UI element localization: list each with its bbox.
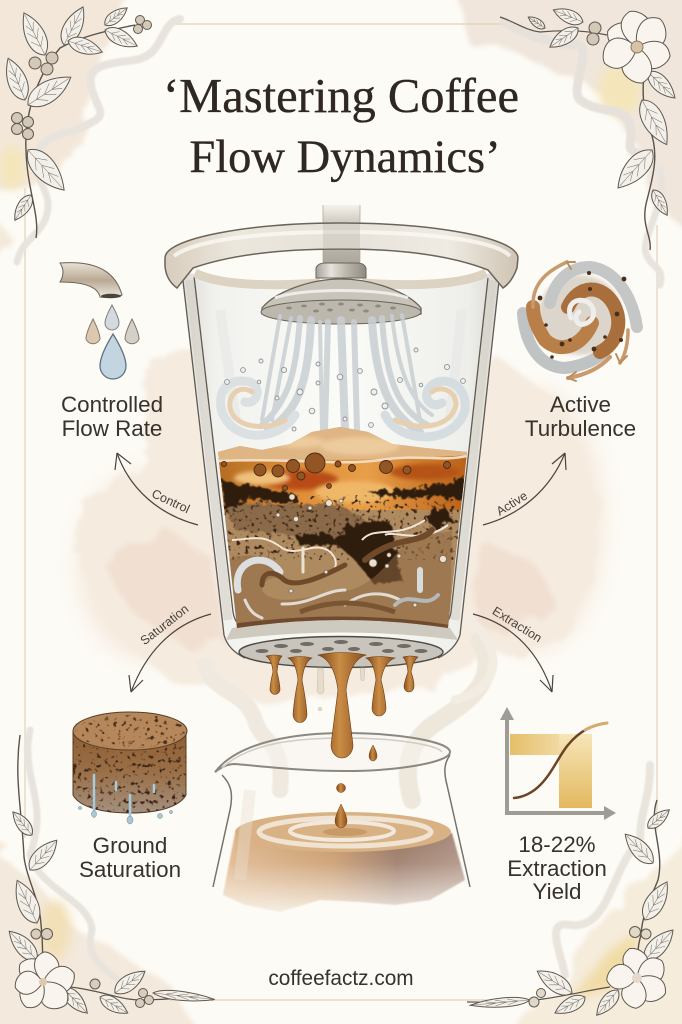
arrow: Active bbox=[483, 453, 566, 525]
top rim ring bbox=[165, 223, 518, 288]
steam below brewer bbox=[205, 620, 493, 800]
left water swirl bbox=[221, 381, 295, 435]
glass carafe bbox=[213, 733, 470, 912]
icon: extraction yield chart bbox=[500, 707, 616, 820]
shower head bbox=[262, 279, 421, 323]
arrow label: Control: Control bbox=[149, 487, 192, 516]
label: Controlled Flow Rate: Flow Rate bbox=[62, 416, 162, 441]
filter plate bbox=[239, 636, 443, 668]
falling drops bbox=[335, 745, 377, 828]
mid speckled grounds bbox=[222, 503, 365, 540]
brewer stem bbox=[323, 205, 360, 265]
carafe coffee bbox=[223, 833, 465, 912]
label: Active Turbulence: Active bbox=[550, 392, 611, 417]
spray droplets bbox=[225, 348, 465, 431]
floral corner: bottom right bbox=[467, 800, 679, 1020]
pale drips bbox=[317, 668, 365, 711]
icon: turbulence swirl bbox=[523, 262, 637, 381]
title: Flow Dynamics’ bbox=[189, 132, 501, 183]
arrow label: Extraction: Extraction bbox=[490, 604, 544, 645]
label: Ground Saturation: Ground bbox=[93, 833, 167, 858]
lower swirls bbox=[225, 530, 452, 628]
coffee bed layers bbox=[218, 427, 467, 628]
title: ‘Mastering Coffee bbox=[163, 70, 519, 123]
arrow label: Active: Active bbox=[494, 489, 530, 519]
website footer: coffeefactz.com bbox=[268, 967, 414, 990]
glass brewer bbox=[60, 223, 637, 990]
right water swirl bbox=[385, 381, 465, 437]
arrow: Extraction bbox=[473, 614, 553, 692]
label: Ground Saturation: Saturation bbox=[79, 857, 181, 882]
floral corner: top left bbox=[0, 3, 152, 238]
floral corner: top right bbox=[500, 4, 680, 250]
coffee bubbles bbox=[221, 453, 450, 490]
icon: saturated coffee puck bbox=[73, 712, 187, 824]
coffee drips bbox=[266, 652, 418, 758]
label: Controlled Flow Rate: Controlled bbox=[61, 392, 163, 417]
floral corner: bottom left bbox=[3, 735, 215, 1019]
glass body bbox=[182, 272, 500, 658]
arrow label: Saturation: Saturation bbox=[138, 602, 191, 648]
arrow: Saturation bbox=[129, 614, 211, 692]
back rim bbox=[195, 273, 486, 285]
label: 18-22% Extraction Yield: Yield bbox=[533, 879, 581, 904]
icon: faucet and drops bbox=[60, 263, 139, 379]
dark coffee grounds bbox=[220, 478, 468, 585]
label: 18-22% Extraction Yield: Extraction bbox=[507, 856, 607, 881]
glass base band bbox=[226, 620, 458, 640]
label: Active Turbulence: Turbulence bbox=[525, 416, 636, 441]
water jets bbox=[262, 315, 432, 432]
arrow: Control bbox=[115, 453, 198, 525]
shower collar bbox=[316, 263, 366, 278]
carafe glass bbox=[213, 755, 470, 887]
label: 18-22% Extraction Yield: 18-22% bbox=[518, 832, 596, 857]
